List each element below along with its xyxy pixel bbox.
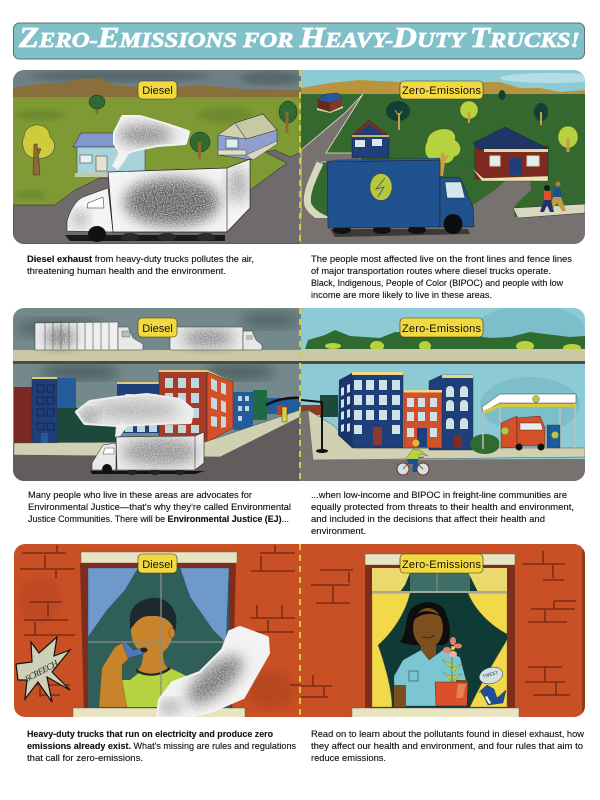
panel: neighborhood — [13, 70, 600, 244]
callout: screech: SCREECH — [23, 658, 60, 684]
label: diesel: Diesel — [142, 323, 173, 335]
road — [301, 410, 585, 481]
building: blue — [338, 372, 403, 448]
scene: zero-emissions neighborhood — [301, 70, 600, 244]
caption: when communities protected: environment. — [311, 526, 366, 536]
scene: zero-emissions city — [301, 305, 585, 481]
icon: tiny tree — [498, 90, 506, 100]
cyclist — [397, 440, 429, 475]
caption: trucks exist — [27, 729, 297, 763]
house: porch — [218, 114, 277, 160]
scene: diesel city — [13, 308, 301, 481]
scene: diesel window — [14, 544, 301, 718]
label: zero-emissions — [400, 554, 483, 573]
street lamp — [301, 400, 328, 453]
electric truck — [501, 416, 545, 450]
overpass truck — [170, 327, 262, 350]
label: diesel: Diesel — [142, 559, 173, 571]
caption: environmental justice: Many people who live in these areas are advocates for — [28, 490, 252, 500]
sidewalk — [308, 410, 585, 460]
icon: lightning logo — [370, 174, 392, 200]
caption: when communities protected: equally protected from threats to their health and environment, — [311, 502, 574, 512]
house: blue roof — [73, 133, 145, 177]
caption: read on: they affect our health and environment, and four rules that aim to — [311, 741, 583, 751]
caption: environmental justice — [28, 490, 291, 524]
curtain right — [180, 568, 229, 643]
caption: people affected: Black, Indigenous, People of Color (BIPOC) and people with low — [311, 278, 564, 288]
charging station — [482, 394, 576, 450]
label: zero-emissions: Zero-Emissions — [402, 559, 482, 571]
caption: when communities protected: and included in the decisions that affect their health and — [311, 514, 545, 524]
bush — [470, 434, 500, 454]
charger — [547, 425, 560, 448]
caption: people affected: of major transportation routes where diesel trucks operate. — [311, 266, 551, 276]
building: orange — [404, 390, 442, 448]
caption: read on — [311, 729, 585, 763]
flower pot — [435, 637, 468, 706]
person with inhaler — [99, 598, 195, 707]
caption: people affected: income are more likely to live in these areas. — [311, 290, 492, 300]
label: zero-emissions: Zero-Emissions — [402, 85, 482, 97]
woman — [394, 602, 467, 707]
caption: environmental justice: Justice Communities. There will be Environmental Justice (EJ)... — [28, 514, 289, 524]
house: navy — [352, 120, 389, 158]
diesel truck city — [90, 432, 205, 475]
bird — [479, 685, 506, 705]
brick lines — [20, 545, 301, 697]
dashed divider — [299, 308, 301, 481]
exhaust plume — [112, 117, 188, 170]
label: diesel — [138, 554, 177, 573]
icon: lime tree right — [558, 126, 578, 152]
icon: dark tree — [386, 101, 410, 130]
icon: small green tree — [89, 95, 105, 114]
curtain left — [88, 568, 138, 637]
caption: environmental justice: Environmental Justice—that's why they're called Environmental — [28, 502, 291, 512]
caption: read on: reduce emissions. — [311, 753, 386, 763]
icon: yellow tree — [22, 125, 54, 175]
label: zero-emissions — [400, 318, 483, 337]
building: navy — [429, 375, 473, 450]
people walking — [540, 182, 566, 212]
caption: people affected — [311, 254, 573, 300]
scene: diesel neighborhood — [13, 70, 301, 244]
speech bubble: tweet: TWEET — [482, 670, 499, 679]
caption: when communities protected — [311, 490, 574, 536]
panel: windows — [14, 544, 585, 718]
caption: read on: Read on to learn about the pollutants found in diesel exhaust, how — [311, 729, 585, 739]
far buildings — [301, 395, 338, 417]
house: small red — [317, 93, 343, 113]
icon: lime tree centre — [425, 129, 461, 176]
caption: diesel exhaust: Diesel exhaust from heavy-duty trucks pollutes the air, — [27, 254, 254, 264]
title banner — [14, 23, 584, 59]
title text: ZERO- EMISSIONS FOR HEAVY- DUTY TRUCKS! — [18, 23, 580, 54]
brick lines — [301, 551, 576, 697]
overpass — [13, 350, 301, 364]
caption: people affected: The people most affected live on the front lines and fence lines — [311, 254, 573, 264]
icon: green tree — [190, 132, 210, 159]
caption: when communities protected: ...when low-income and BIPOC in freight-line communities are — [311, 490, 567, 500]
house: brick — [471, 127, 549, 181]
exhaust cloud — [158, 628, 268, 717]
window bars — [88, 572, 226, 708]
speech bubble: tweet — [477, 665, 505, 686]
label: diesel: Diesel — [142, 85, 173, 97]
road — [13, 417, 300, 481]
overpass — [301, 349, 585, 364]
dashed divider — [299, 70, 301, 244]
traffic light — [266, 398, 301, 422]
icon: far tree — [279, 101, 297, 133]
window frame — [80, 552, 237, 717]
label: diesel — [138, 81, 177, 99]
caption: trucks exist: that call for zero-emissions. — [27, 753, 143, 763]
exhaust cloud — [77, 395, 192, 437]
scene: zero-emissions window — [301, 544, 585, 718]
panel: city — [13, 305, 585, 481]
label: diesel — [138, 318, 177, 337]
callout: screech — [16, 637, 70, 702]
label: zero-emissions: Zero-Emissions — [402, 323, 482, 335]
icon: dark tree right — [534, 103, 548, 125]
caption: trucks exist: Heavy-duty trucks that run on electricity and produce zero — [27, 729, 274, 739]
icon: lime tree — [460, 101, 478, 123]
zero-emissions truck — [327, 158, 474, 237]
diesel truck — [65, 159, 250, 242]
sidewalk — [14, 410, 300, 457]
window frame — [365, 554, 515, 710]
dashed divider — [299, 544, 301, 717]
caption: diesel exhaust: threatening human health and the environment. — [27, 266, 226, 276]
caption: trucks exist: emissions already exist. What's missing are rules and regulations — [27, 741, 297, 751]
building row — [14, 370, 300, 443]
label: zero-emissions — [400, 81, 483, 99]
overpass truck — [35, 322, 143, 350]
caption: diesel exhaust — [27, 254, 254, 276]
tree line — [305, 330, 585, 349]
curtains — [372, 568, 507, 707]
